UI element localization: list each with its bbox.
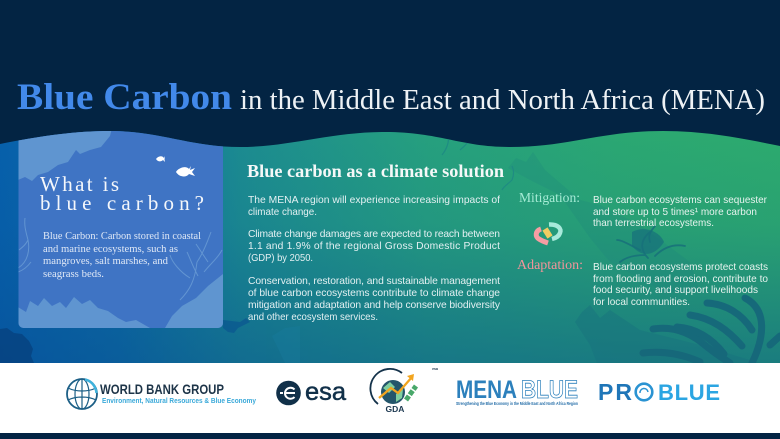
- heading: what is blue carbon: blue carbon?: [40, 191, 204, 215]
- coral silhouette lower left: [0, 328, 34, 363]
- fish: large: [176, 166, 195, 176]
- climate solution text: 1.1 and 1.9% of the regional Gross Domestic Product: [248, 241, 500, 252]
- mitigation label: Mitigation:: [519, 191, 580, 206]
- climate solution text: (GDP) by 2050.: [248, 253, 313, 264]
- adaptation text: Blue carbon ecosystems protect coasts: [593, 262, 768, 273]
- kelp body lower right: [576, 306, 648, 332]
- panel: climate solution: [247, 161, 504, 323]
- logo: GDA: [370, 367, 438, 414]
- small seaweed top centre: [442, 134, 514, 190]
- mitigation text: and store up to 5 times¹ more carbon: [593, 207, 757, 218]
- panel: logo band: [0, 363, 780, 433]
- heading: what is blue carbon: [40, 176, 204, 210]
- mitigation text: Blue carbon ecosystems can sequester: [593, 195, 768, 206]
- panel: adaptation: [517, 258, 768, 308]
- icon: world bank globe: [67, 379, 97, 409]
- climate solution text: The MENA region will experience increasing impacts of: [248, 195, 500, 206]
- dark branch silhouette centre right: [617, 226, 685, 262]
- adaptation text: for local communities.: [593, 297, 690, 308]
- logo: World Bank Group: WORLD BANK GROUP: [100, 381, 224, 397]
- climate solution text: Conservation, restoration, and sustainable management: [248, 276, 500, 287]
- dark kelp lower right: [643, 298, 780, 363]
- coral branches: [18, 218, 222, 300]
- logo: PROBLUE: BLUE: [658, 380, 720, 405]
- climate solution text: Climate change damages are expected to reach between: [248, 229, 500, 240]
- climate solution text: mitigation and adaptation and help conserve biodiversity: [248, 300, 501, 311]
- panel: ocean wave background: [0, 125, 780, 365]
- climate solution text: and other ecosystem services.: [248, 312, 378, 323]
- frond silhouette lower centre: [272, 326, 300, 363]
- logo: MENA Blue: MENA: [456, 376, 517, 404]
- adaptation text: food security, and support livelihoods: [593, 285, 758, 296]
- logo: MENA Blue: [456, 376, 578, 406]
- logo: World Bank Group: [67, 379, 257, 409]
- adaptation label: Adaptation:: [517, 258, 583, 273]
- panel: what is blue carbon: [18, 120, 223, 330]
- definition text: seagrass beds.: [43, 268, 104, 280]
- logo: PROBLUE: PR: [598, 379, 632, 405]
- logo: MENA Blue: Strengthening the Blue Economy in the Middle East and North Africa Region: [456, 401, 578, 406]
- fish: small: [156, 156, 165, 162]
- definition text: and marine ecosystems, such as: [43, 243, 178, 255]
- definition text: [43, 230, 201, 280]
- coral: bottom left: [18, 297, 150, 330]
- logo: World Bank Group: Environment, Natural Resources & Blue Economy: [102, 396, 257, 405]
- heading: climate solution: Blue carbon as a climate solution: [247, 161, 504, 181]
- heading: what is blue carbon: What is: [40, 172, 119, 196]
- logo: esa: [276, 378, 346, 406]
- title: in the Middle East and North Africa (MENA): [240, 85, 765, 116]
- adaptation text: [593, 262, 768, 308]
- climate solution text: climate change.: [248, 207, 317, 218]
- coral silhouette beside card: [223, 318, 250, 333]
- mitigation text: than terrestrial ecosystems.: [593, 218, 714, 229]
- panel: mitigation: [519, 191, 768, 229]
- title: Blue Carbon: [17, 77, 232, 118]
- coral: bottom right: [165, 274, 223, 330]
- logo: GDA: GDA: [386, 404, 404, 414]
- title: [17, 77, 765, 118]
- definition text: mangroves, salt marshes, and: [43, 255, 169, 267]
- coral: top left: [18, 131, 112, 181]
- climate solution text: [248, 195, 501, 323]
- mitigation text: [593, 195, 768, 229]
- seaweed silhouette upper right: [508, 152, 700, 292]
- logo: esa: esa: [305, 378, 346, 406]
- icon: mitigation and adaptation loop: [536, 224, 561, 243]
- climate solution text: of blue carbon ecosystems contribute to climate change: [248, 288, 500, 299]
- adaptation text: from flooding and erosion, contribute to: [593, 274, 768, 285]
- definition text: Blue Carbon: Carbon stored in coastal: [43, 230, 201, 242]
- logo: PROBLUE: [598, 379, 720, 405]
- logo: GDA: esa: [432, 367, 438, 371]
- logo: MENA Blue: BLUE: [521, 376, 578, 404]
